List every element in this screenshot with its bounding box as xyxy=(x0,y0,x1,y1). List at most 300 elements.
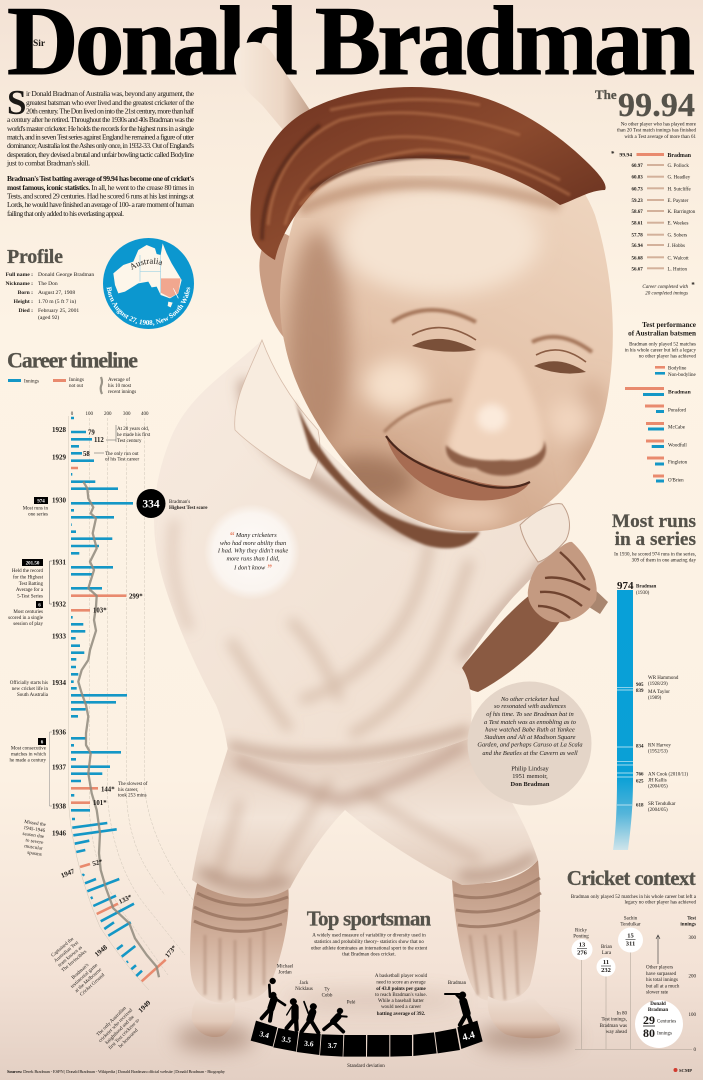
year labels xyxy=(52,426,153,1014)
callout: 201.50: Average for a xyxy=(16,588,44,593)
quote circle: who had more ability than xyxy=(220,540,286,547)
callout: Philip Lindsay quote: Don Bradman xyxy=(511,781,550,788)
callout: consecutive centuries: Most consecutive xyxy=(11,746,47,752)
axis: Test xyxy=(687,916,696,922)
callout: 201.50: 201.50 xyxy=(26,562,40,566)
description: statistics and probability theory- statistics show that no xyxy=(314,940,424,945)
annotation: slowest innings: his career, xyxy=(118,788,138,793)
description: other athlete dominates an international sport to the extent xyxy=(311,946,428,952)
bodyline bar chart: Woodfull xyxy=(668,444,687,448)
bodyline bar chart: Bradman xyxy=(668,390,692,396)
callout: most centuries in a session: scored in a single xyxy=(8,616,44,621)
callout: 974: 974 xyxy=(37,500,45,504)
callout: 201.50: 5-Test Series xyxy=(17,594,43,600)
silhouette: Bradman xyxy=(445,992,472,1025)
callout: most centuries in a session: Most centuries xyxy=(13,610,43,615)
block values: 3.7 xyxy=(328,1041,337,1050)
intro text xyxy=(6,83,195,218)
hair xyxy=(250,87,606,260)
left leg pad xyxy=(190,880,289,1003)
callout: 201.50 xyxy=(12,559,52,604)
neck shadow xyxy=(295,400,480,548)
callout: highest test score 334: Highest Test score xyxy=(169,506,208,511)
hair shadow xyxy=(300,184,560,210)
annotation: 80 test innings: Bradman was xyxy=(600,1024,627,1029)
note xyxy=(617,122,697,140)
annotation: first century: Test century xyxy=(117,439,142,444)
map of Australia: Born August 27, 1908, New South Wales xyxy=(106,286,190,326)
value labels: 133* xyxy=(118,893,134,906)
athlete names: Nicklaus xyxy=(295,987,313,992)
callout: Philip Lindsay quote: No other cricketer had xyxy=(500,696,560,703)
block values: 3.5 xyxy=(281,1034,292,1045)
heading: profile: Profile xyxy=(7,246,63,268)
panel: most runs in a series: (2004/05) xyxy=(648,784,668,790)
averages chart: 59.23 xyxy=(631,199,643,204)
callout: 201.50: Test Batting xyxy=(19,582,43,587)
profile facts: Died : xyxy=(19,308,33,314)
intro text: Bradman's Test batting average of 99.94 has become one of cricket's xyxy=(7,174,194,183)
heading: of Australian batsmen xyxy=(628,330,696,338)
heading: Cricket context xyxy=(567,866,696,890)
description: In 1930, he scored 974 runs in the series, xyxy=(614,552,696,558)
callout: Philip Lindsay quote: and the Beatles at the Cavern as well xyxy=(482,750,578,757)
basketball text: of 43.8 points per game xyxy=(376,987,427,992)
legend: recent innings xyxy=(108,390,136,395)
year labels: 1934 xyxy=(52,679,66,687)
legend: his 10 most xyxy=(108,384,132,389)
smile lines xyxy=(384,400,452,432)
annotation: missed season: spasms xyxy=(27,851,42,858)
floor shadows xyxy=(175,990,575,1050)
panel: most runs in a series: 625 xyxy=(636,780,644,784)
annotation: knighthood: first Test cricketer to xyxy=(108,1018,141,1051)
averages chart: H. Sutcliffe xyxy=(668,187,692,192)
averages chart: 56.68 xyxy=(631,256,643,261)
annotation: knighthood: The only Australian xyxy=(96,1006,128,1038)
intro text: a century after he retired. Throughout the 1930s and 40s Bradman was the xyxy=(7,115,195,124)
footnote: 20 completed innings xyxy=(645,291,688,296)
averages chart: C. Walcott xyxy=(668,256,689,261)
callout: Philip Lindsay quote: 1951 memoir, xyxy=(512,773,548,780)
Tendulkar bubble: Tendulkar xyxy=(620,922,641,928)
athlete names: Jordan xyxy=(278,970,292,976)
basketball text: batting average of 392. xyxy=(377,1012,426,1017)
year labels: 1949 xyxy=(137,999,153,1014)
value labels xyxy=(83,430,179,959)
annotation: knighthood: be honoured xyxy=(118,1028,140,1049)
value labels: 299* xyxy=(129,594,143,600)
publisher logo xyxy=(674,1068,692,1073)
annotation: knighthood xyxy=(94,1004,147,1057)
averages chart: G. Pollock xyxy=(668,164,689,169)
callout: Philip Lindsay quote: so resonated with audiences xyxy=(494,703,567,710)
Bradman bubble: 80 xyxy=(643,1026,655,1040)
mouth xyxy=(386,436,530,501)
Lara bubble: Lara xyxy=(602,951,612,956)
annotation: missed season: 1945-1946 xyxy=(23,826,46,834)
averages chart: G. Sobers xyxy=(668,234,687,239)
publisher logo: SCMP xyxy=(679,1068,692,1073)
not-out bars xyxy=(71,468,166,981)
annotation: 80 test innings: Test innings, xyxy=(602,1018,627,1022)
panel: profile xyxy=(6,238,194,329)
callout: consecutive centuries: he made a century xyxy=(9,758,46,764)
silhouette: Jordan xyxy=(262,978,285,1021)
silhouette: Cobb xyxy=(302,1002,318,1033)
intro text: most famous, iconic statistics. In all, he went to the crease 80 times in xyxy=(7,183,194,192)
quote circle: “ xyxy=(229,531,234,542)
averages chart: 56.67 xyxy=(631,267,643,272)
axis: 0 xyxy=(694,1048,696,1053)
annotation: missed season xyxy=(20,820,47,858)
panel: most runs in a series: (1952/53) xyxy=(648,750,668,754)
averages chart: 99.94 xyxy=(619,152,632,158)
intro text: ir Donald Bradman of Australia was, beyond any argument, the xyxy=(26,89,195,98)
annotation: 80 test innings: In 80 xyxy=(617,1012,627,1016)
intro text: failing that only added to his everlasting appeal. xyxy=(7,209,124,218)
legend: not out xyxy=(69,384,84,389)
year labels: 1932 xyxy=(52,600,66,608)
averages chart: 58.61 xyxy=(631,222,643,227)
Bradman bubble: Donald xyxy=(650,1002,666,1007)
right leg pad xyxy=(452,860,541,1002)
note: than 20 Test match innings has finished xyxy=(617,128,696,134)
callout: highest test score 334: Bradman's xyxy=(169,500,190,505)
quote circle: I don't know xyxy=(234,564,265,571)
averages chart: E. Paynter xyxy=(668,199,689,204)
annotation: knighthood: cricketer who received xyxy=(98,1008,134,1044)
annotation: south australia xyxy=(10,681,49,698)
heading: Test performance xyxy=(642,321,696,329)
annotation: south australia: South Australia xyxy=(17,693,49,698)
Ponting bubble: Ponting xyxy=(573,934,589,940)
Bradman bubble: Bradman xyxy=(648,1008,668,1013)
annotation: run out: The only run out xyxy=(105,452,139,457)
description: Bradman only played 52 matches xyxy=(629,342,696,348)
annotation: south australia: Officially starts his xyxy=(10,681,48,686)
quote circle: I had. Why they didn't make xyxy=(217,548,288,555)
silhouette: Pele xyxy=(324,1008,347,1032)
bodyline bar chart xyxy=(625,387,692,484)
callout: Philip Lindsay quote: Garden, and perhaps Caruso at La Scala xyxy=(477,742,583,748)
averages chart: K. Barrington xyxy=(668,210,696,215)
profile facts: The Don xyxy=(38,281,58,287)
annotation: testimonial game xyxy=(66,958,108,999)
Ponting bubble: Ricky xyxy=(575,928,587,934)
year labels: 1928 xyxy=(52,426,66,434)
brows and eyes xyxy=(392,310,476,322)
legend: Non-bodyline xyxy=(668,373,697,378)
arrow xyxy=(656,935,660,964)
footnote: * xyxy=(691,281,695,289)
panel: most runs in a series: 618 xyxy=(636,804,644,808)
profile facts: Nickname : xyxy=(6,281,33,287)
quote circle: ” xyxy=(267,563,272,574)
annotation: south australia: new cricket life in xyxy=(12,687,48,692)
Tendulkar bubble: Sachin xyxy=(624,916,638,922)
drop cap: S xyxy=(7,83,26,122)
callout: Philip Lindsay quote: Philip Lindsay xyxy=(511,766,550,772)
annotation: other players: have surpassed xyxy=(646,972,677,977)
averages chart xyxy=(611,150,696,272)
standard deviation blocks and silhouettes xyxy=(251,978,483,1057)
profile facts: Born : xyxy=(18,290,33,296)
annotation: 80 test innings: way ahead xyxy=(606,1030,627,1035)
basketball text: to reach Bradman's value. xyxy=(375,993,427,998)
profile facts: 1.70 m (5 ft 7 in) xyxy=(38,298,76,305)
panel: most runs in a series: 905 xyxy=(636,683,644,688)
panel: most runs in a series: SR Tendulkar xyxy=(648,802,676,807)
intro text: just to combat Bradman's skill. xyxy=(6,158,90,168)
description xyxy=(614,552,696,564)
panel: most runs in a series: 839 xyxy=(636,689,644,694)
heading: career timeline: Career timeline xyxy=(7,348,138,372)
panel: most runs in a series: 766 xyxy=(636,772,644,778)
basketball text: While a baseball batter xyxy=(378,999,424,1004)
value labels: 112 xyxy=(94,437,104,444)
profile facts: Full name : xyxy=(6,272,33,278)
heading: in a series xyxy=(615,529,696,550)
annotation: run out xyxy=(94,452,139,462)
averages chart: Bradman xyxy=(668,153,692,159)
trousers xyxy=(192,738,538,898)
annotation: other players xyxy=(646,966,680,996)
profile facts: Height : xyxy=(14,299,33,305)
callout: Philip Lindsay quote: have watched Babe Ruth at Yankee xyxy=(485,726,575,734)
athlete names: Pelé xyxy=(347,1000,356,1006)
axis: 100 xyxy=(86,412,94,417)
profile facts: August 27, 1908 xyxy=(38,290,75,296)
bar dividers xyxy=(617,688,633,805)
annotation: knighthood: knighthood and the xyxy=(105,1014,136,1046)
year labels: 1948 xyxy=(93,943,109,959)
basketball text: A basketball player would xyxy=(375,974,428,979)
panel: the 99.94 xyxy=(595,87,697,296)
profile facts: (aged 92) xyxy=(38,314,59,321)
callout: consecutive centuries: matches in which xyxy=(11,752,46,758)
profile facts xyxy=(6,272,94,321)
description: 309 of them in one amazing day xyxy=(632,558,696,564)
Lara bubble: Brian xyxy=(601,945,613,950)
averages chart: J. Hobbs xyxy=(668,244,685,249)
annotation: first century: At 20 years old, xyxy=(117,427,149,432)
year labels: 1938 xyxy=(52,802,66,810)
annotation: missed season: muscular xyxy=(24,844,43,852)
panel: most runs in a series: Bradman xyxy=(636,584,656,590)
Lara bubble: 232 xyxy=(601,967,611,974)
intro text: match, and in seven Test series against England he remained a figure of utter xyxy=(7,132,194,142)
legend: Bodyline xyxy=(668,366,687,372)
averages chart: 57.78 xyxy=(631,234,643,239)
facial features xyxy=(384,310,592,501)
note: with a Test average of more than 61 xyxy=(624,135,696,140)
Ponting bubble xyxy=(572,928,592,960)
callout: Philip Lindsay quote: a Test match was as ennobling as to xyxy=(484,719,576,726)
panel: cricket context xyxy=(567,866,697,1073)
annotation: testimonial game: at the Melbourne xyxy=(74,967,104,994)
basketball text: need to score an average xyxy=(376,980,426,986)
ear xyxy=(259,233,312,347)
annotation: invincibles: The Invincibles xyxy=(61,950,88,973)
callout: Philip Lindsay quote: of his time. To see Bradman bat in xyxy=(486,711,574,718)
athlete names: Ty xyxy=(324,988,330,992)
legend: Average of xyxy=(108,378,130,383)
callout: consecutive centuries: 6 xyxy=(41,740,44,746)
annotation: invincibles: Captained the xyxy=(51,936,76,959)
heading xyxy=(612,511,696,550)
value labels: 52* xyxy=(92,858,104,868)
description xyxy=(311,934,428,958)
intro text: desperation, they devised a brutal and unfair bowling tactic called Bodyline xyxy=(7,150,195,159)
description: that Bradman does cricket. xyxy=(342,952,396,958)
annotation: invincibles xyxy=(49,936,88,973)
bodyline bar chart: McCabe xyxy=(668,426,686,430)
panel: most runs in a series: (1989) xyxy=(648,696,662,701)
heading: Top sportsman xyxy=(307,906,432,930)
title: Sir xyxy=(33,39,46,49)
panel: most runs in a series: RN Harvey xyxy=(648,744,671,748)
heading xyxy=(628,321,696,338)
intro text: world's master cricketer. He holds the records for the highest runs in a single xyxy=(7,124,195,133)
callout: consecutive centuries xyxy=(9,732,52,806)
year labels: 1929 xyxy=(52,454,66,462)
callout: Philip Lindsay quote: Stadium and Ali at Madison Square xyxy=(484,734,576,741)
map of Australia xyxy=(103,238,194,329)
callout: highest test score 334 xyxy=(136,489,208,518)
panel: most runs in a series xyxy=(612,511,696,850)
tapered runs bar xyxy=(613,590,633,850)
callout: most centuries in a session: session of play xyxy=(13,622,43,627)
grid lines xyxy=(68,416,193,990)
bar labels: 974 xyxy=(617,580,634,592)
legend xyxy=(655,366,697,378)
annotation: testimonial game: testimonial game xyxy=(70,963,100,990)
axis: 300 xyxy=(123,412,131,417)
head xyxy=(280,130,613,531)
panel: most runs in a series: (1928/29) xyxy=(648,682,668,687)
annotation: 80 test innings xyxy=(600,1012,627,1035)
value labels: 79 xyxy=(88,430,95,436)
legend: Innings xyxy=(24,380,39,384)
year labels: 1933 xyxy=(52,632,66,640)
value labels: 173* xyxy=(164,944,179,959)
athlete names: Jack xyxy=(300,981,309,986)
Bradman bubble xyxy=(635,1000,683,1048)
annotation: testimonial game: Cricket Ground xyxy=(79,973,106,998)
Ponting bubble: 13 xyxy=(579,942,586,948)
panel: most runs in a series: (2004/05) xyxy=(648,808,668,813)
annotation: invincibles: team known as xyxy=(58,945,84,968)
intro text: dominance; Australia lost the Ashes only once, in 1932-33. Out of England's xyxy=(7,141,194,150)
panel: most runs in a series: WR Hammond xyxy=(648,676,679,681)
callout: 201.50: for the Highest xyxy=(13,576,44,580)
averages chart: * xyxy=(611,150,615,158)
averages chart: 60.73 xyxy=(631,187,643,192)
forearm xyxy=(458,595,572,692)
callout: Philip Lindsay quote xyxy=(468,682,592,806)
axis: 100 xyxy=(688,1013,696,1018)
silhouette: Nicklaus xyxy=(287,998,297,1030)
heading: the 99.94: 99.94 xyxy=(618,87,695,124)
footnote xyxy=(642,281,695,296)
year labels: 1930 xyxy=(52,496,66,504)
annotation: first century: he made his first xyxy=(117,433,151,438)
right shoe xyxy=(488,996,560,1038)
panel: most runs in a series: JH Kallis xyxy=(648,778,667,784)
axis xyxy=(680,916,696,1053)
annotation: testimonial game: Bradman's xyxy=(71,963,90,981)
sources: Sources: Derek Bradman - ESPN | Donald Bradman - Wikipedia | Donald Bradman official website | Donald Bradman - Biography xyxy=(7,1069,226,1074)
year labels: 1947 xyxy=(60,867,76,880)
bat blade xyxy=(234,42,322,150)
annotation: missed season: Missed the xyxy=(24,820,47,828)
annotation: other players: Other players xyxy=(646,966,673,970)
annotation: first century xyxy=(106,425,151,444)
legend xyxy=(8,377,136,395)
callout: most centuries in a session xyxy=(8,601,44,627)
panel: most runs in a series: AN Cook (2010/11) xyxy=(648,772,688,778)
axis: 400 xyxy=(141,412,149,417)
heading: the 99.94: The xyxy=(595,87,617,102)
footnote: Career completed with xyxy=(642,285,688,290)
axis: 200 xyxy=(688,974,696,980)
description xyxy=(571,895,697,906)
Bradman bubble: Innings xyxy=(657,1032,672,1036)
description: Bradman only played 52 matches in his whole career but left a xyxy=(571,895,697,900)
description: in his whole career but left a legacy xyxy=(625,348,696,354)
intro text: Lords, he would have finished an average of 100- a rare moment of human xyxy=(7,200,194,209)
callout: highest test score 334: 334 xyxy=(142,498,160,510)
panel: most runs in a series: (1930) xyxy=(636,591,650,596)
description xyxy=(625,342,696,360)
value labels: 58 xyxy=(83,451,90,458)
annotation: other players: but all at a much xyxy=(646,984,680,990)
quote circle: Many cricketers xyxy=(234,532,277,539)
annotation: other players: his total innings xyxy=(646,978,678,983)
averages chart: 56.94 xyxy=(631,244,643,249)
panel: most runs in a series: MA Taylor xyxy=(648,690,670,695)
annotation: slowest innings xyxy=(118,782,148,798)
nose xyxy=(448,349,544,472)
description: no other player has achieved xyxy=(639,354,696,360)
bodyline bar chart: Ponsford xyxy=(668,408,687,414)
Bradman bubble: 29 xyxy=(643,1013,655,1027)
map of Australia: Australia xyxy=(131,258,162,270)
averages chart: G. Headley xyxy=(668,176,691,181)
axis label: Standard deviation xyxy=(347,1064,385,1069)
value labels: 101* xyxy=(93,800,107,807)
axis: 300 xyxy=(688,936,696,941)
basketball text: would need a career xyxy=(381,1005,421,1010)
panel: most runs in a series: 834 xyxy=(636,744,644,750)
description: legacy no other player has achieved xyxy=(624,900,696,906)
intro text: greatest batsman who ever lived and the greatest cricketer of the xyxy=(26,98,195,107)
annotation: invincibles: Australian Test xyxy=(54,940,80,964)
value labels: 144* xyxy=(101,786,115,794)
athlete names: Cobb xyxy=(322,994,333,998)
annotation: slowest innings: took 253 mins xyxy=(118,794,147,798)
axis: 0 xyxy=(71,412,74,417)
annotation: run out: of his Test career xyxy=(105,458,139,462)
averages chart: L. Hutton xyxy=(668,267,687,272)
averages chart: 58.67 xyxy=(631,210,643,215)
left shoe xyxy=(192,998,235,1037)
callout: 974: one series xyxy=(28,512,48,518)
annotation: missed season: season due xyxy=(22,832,45,840)
description: A widely used measure of variability or diversity used in xyxy=(312,934,426,938)
year labels: 1937 xyxy=(52,764,66,772)
